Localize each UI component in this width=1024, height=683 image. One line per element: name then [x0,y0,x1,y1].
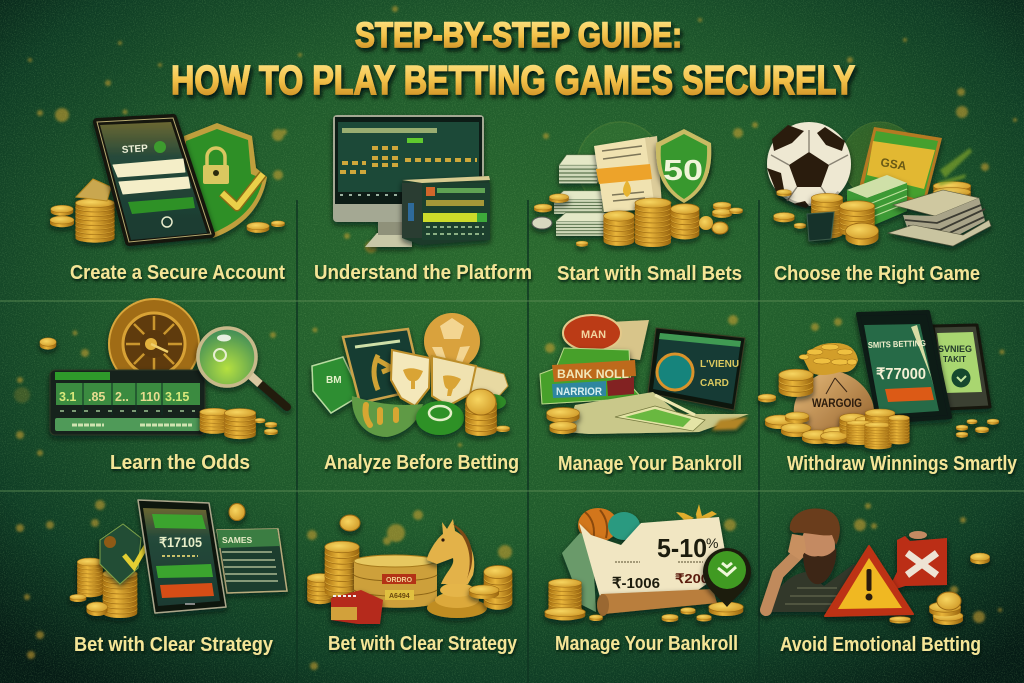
title line 2: HOW TO PLAY BETTING GAMES SECURELY [171,57,855,103]
icon: money bag [794,343,874,444]
icon: ticket: 5-10 [657,533,707,563]
icon: odds board: 3.1 [59,390,76,404]
title [171,16,855,103]
icon: tablet [842,122,942,208]
icon: red chip and beige card [563,315,649,360]
icon: red X panel [887,531,947,592]
icon: odds board [50,370,205,435]
icon: halo [577,122,663,208]
label: Understand the Platform [314,262,532,284]
label: Analyze Before Betting [324,452,519,474]
label: Create a Secure Account [70,262,285,284]
icon: odds board: 2.. [115,390,129,404]
icon: main phone: SMITS BETTING [868,338,926,350]
icon: coins [890,553,990,625]
label: Learn the Odds [110,452,250,474]
icon: coin stacks [532,194,743,247]
panel: Learn the Odds [40,299,287,474]
icon: black pouch [807,212,834,241]
icon: shield 50 [656,129,711,203]
icon: phone: STEP [121,143,149,156]
icon: roulette wheel [109,299,199,389]
panel: Bet with Clear Strategy (phone) [70,500,287,656]
icon: right coin stack [469,566,512,610]
icon: coins [40,338,278,439]
label: Choose the Right Game [774,263,980,285]
icon: odds board: 110 [140,390,160,404]
panel: Understand the Platform [314,115,532,284]
icon: shield with lock [184,123,267,238]
icon: document [217,529,287,593]
icon: phone: ₹17105 [159,535,202,550]
icon: knight piece [427,519,487,618]
icon: terminal box [402,176,490,245]
icon: document [594,136,662,212]
label: Start with Small Bets [557,263,742,285]
label: Manage Your Bankroll [558,453,742,475]
icon: coin stacks [70,504,245,618]
icon: coin piles [758,369,999,449]
icon: chip drum: ORDRO [386,577,413,584]
icon: cash papers [565,392,749,434]
label: Manage Your Bankroll [555,633,738,655]
icon: tablet [648,328,745,410]
icon: shield 50: 50 [663,155,703,187]
icon: phone [97,118,211,242]
icon: document: SAMES [222,535,253,545]
icon: tablet: CARD [700,378,729,389]
icon: coins [546,408,748,434]
icon: odds board: .85 [88,390,105,404]
icon: ticket: ₹200 [675,571,709,586]
icon: magnifying glass [198,328,287,407]
icon: cash stacks [554,145,709,236]
icon: main phone [858,312,950,422]
icon: red chip and beige card: MAN [581,329,606,341]
icon: bankroll banners [540,348,642,404]
icon: coin stacks [307,515,360,604]
panel: Create a Secure Account [50,118,285,284]
icon: monitor [333,115,484,247]
icon: leaf badge [416,394,506,435]
icon: chip drum: A6494 [389,593,410,600]
icon: flower [676,504,717,531]
icon: ticket: % [706,535,718,551]
icon: soccer ball gold [424,313,480,369]
icon: location pin [589,548,751,622]
icon: main phone: ₹77000 [876,366,926,383]
icon: ticket: ₹-1006 [612,575,660,592]
icon: shield cards [391,350,508,406]
icon: dollar bills [888,190,991,246]
icon: second phone: SVNIEG [938,344,972,354]
icon: money bag: WARGOIG [812,396,862,410]
label: Avoid Emotional Betting [780,634,981,656]
icon: green rays [938,148,972,186]
icon: distressed man [766,508,868,612]
icon: second phone [933,325,990,409]
icon: tablet: GSA [880,155,908,173]
icon: odds board: 3.15 [165,390,189,404]
icon: green tag: BM [326,375,342,386]
icon: bankroll banners: NARRIOR [556,386,602,398]
icon: soccer ball [767,122,851,208]
icon: coin stacks [774,182,971,245]
icon: coins left [50,179,285,243]
icon: phone [138,500,226,613]
icon: poster [343,329,422,403]
panel: Manage Your Bankroll (row 3) [545,504,751,655]
icon: second phone: TAKIT [943,355,966,364]
panel: Bet with Clear Strategy (chess) [307,515,518,655]
icon: green bowl [352,396,423,437]
icon: chip drum [354,555,437,608]
title line 1: STEP-BY-STEP GUIDE: [355,16,682,55]
icon: scroll [597,589,717,616]
icon: colorful items [578,508,654,545]
icon: ticket [562,517,728,612]
panel: Avoid Emotional Betting [766,508,990,656]
icon: coin stack [545,579,585,620]
icon: bankroll banners: BANK NOLL [557,367,629,381]
icon: warning triangle [825,546,913,616]
label: Bet with Clear Strategy [328,633,518,655]
icon: check badge [100,524,149,584]
panel: Manage Your Bankroll (row 2) [540,315,749,475]
icon: green tag [312,357,361,413]
panel: Start with Small Bets [532,122,743,285]
panel: Choose the Right Game [767,122,991,285]
icon: coin stack [465,389,510,436]
icon: red box [331,590,383,624]
icon: green cash [847,175,907,228]
panel: Analyze Before Betting [312,313,519,474]
label: Bet with Clear Strategy [74,634,274,656]
icon: tablet: L'VIENU [700,359,739,370]
panel: Withdraw Winnings Smartly [758,312,1018,475]
